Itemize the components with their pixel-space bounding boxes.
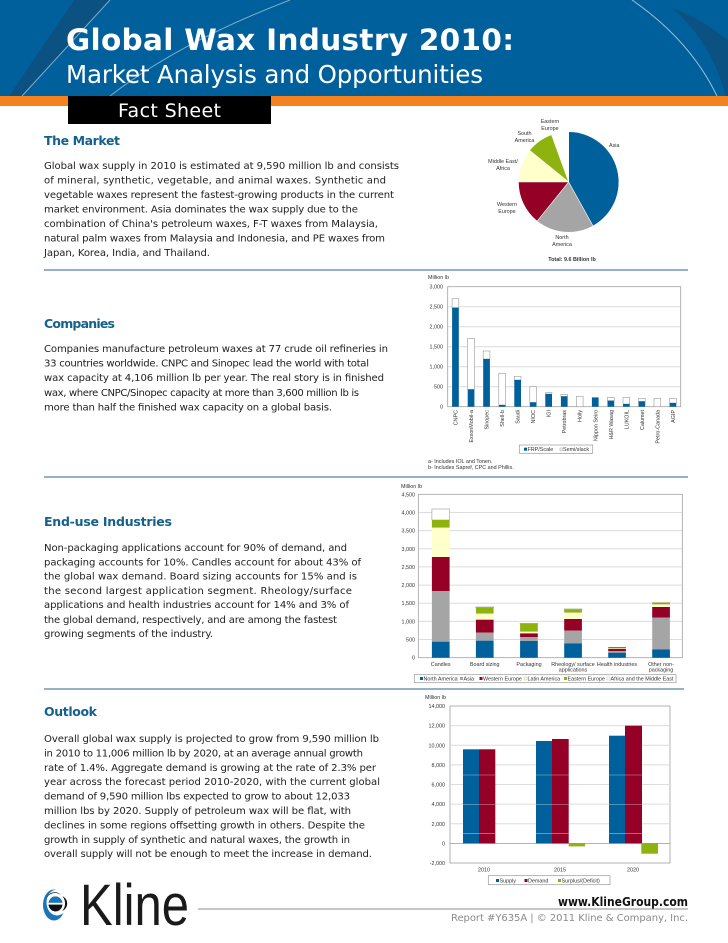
bar chart: supply and demand outlook: 2,000 [432, 822, 445, 828]
text block: companies: 33 countries worldwide. CNPC and Sinopec lead the world with total [44, 359, 369, 370]
bar chart: company capacity: b- Includes Sapref, CPC and Phillis. [428, 465, 514, 471]
stacked bar chart: end-use demand: Board sizing [470, 662, 500, 668]
heading: companies: Companies [44, 316, 115, 331]
bar chart: company capacity: ExxonMobil-a [469, 410, 475, 443]
text block: end-use industries: packaging accounts for 10%. Candles account for about 43% of [44, 557, 361, 568]
bar chart: company capacity: Holly [578, 410, 584, 422]
text block: end-use industries [44, 543, 361, 640]
text block: outlook: declines in some regions offsetting growth in others. Despite the [44, 820, 365, 831]
text block: end-use industries: the global demand, respectively, and are among the fastest [44, 615, 337, 626]
bar chart: supply and demand outlook: -2,000 [430, 861, 445, 867]
text block: outlook: Overall global wax supply is projected to grow from 9,590 million lb [44, 734, 379, 745]
text block: end-use industries: the global wax demand. Board sizing accounts for 15% and is [44, 572, 357, 583]
text block: outlook: year across the forecast period 2010-2020, with the current global [44, 777, 380, 788]
pie chart: supply by region: Europe [541, 126, 559, 132]
bar chart: company capacity: 1,500 [430, 345, 443, 351]
stacked bar chart: end-use demand: 0 [412, 656, 415, 662]
text block: outlook: million lbs by 2020. Supply of petroleum wax will be flat, with [44, 806, 351, 817]
pie chart: supply by region: Africa [496, 166, 510, 172]
bar chart: company capacity: Calumet [640, 410, 646, 430]
bar chart: company capacity: IGI [547, 410, 553, 417]
stacked bar chart: end-use demand: 4,500 [402, 492, 415, 498]
stacked bar chart: end-use demand: Health industries [597, 662, 637, 668]
bar chart: company capacity: 500 [434, 385, 443, 391]
pie chart: supply by region [488, 119, 620, 263]
text block: companies: wax, where CNPC/Sinopec capacity at more than 3,600 million lb is [44, 388, 359, 399]
bar chart: company capacity: Nippon Seiro [593, 410, 599, 441]
stacked bar chart: end-use demand: Rheology/ surface [551, 662, 595, 668]
bar chart: supply and demand outlook: 4,000 [432, 802, 445, 808]
logo: Kline [43, 873, 189, 938]
stacked bar chart: end-use demand: Latin America [528, 677, 560, 683]
stacked bar chart: end-use demand: Other non- [648, 662, 674, 668]
stacked bar chart: end-use demand: 2,000 [402, 583, 415, 589]
fact sheet tab [68, 96, 271, 124]
bar chart: company capacity: 2,000 [430, 325, 443, 331]
text block: the market: Global wax supply in 2010 is estimated at 9,590 million lb and consists [44, 161, 399, 172]
text block: outlook [44, 734, 380, 860]
bar chart: company capacity: Petro-Canada [655, 410, 661, 444]
stacked bar chart: end-use demand: 3,000 [402, 547, 415, 553]
heading: outlook: Outlook [44, 704, 98, 719]
text block: the market: of mineral, synthetic, vegetable, and animal waxes. Synthetic and [44, 176, 386, 186]
bar chart: company capacity: NIOC [531, 410, 537, 423]
stacked bar chart: end-use demand: 3,500 [402, 529, 415, 535]
bar chart: supply and demand outlook: Demand [528, 878, 548, 884]
text block: outlook: growth in supply of synthetic and natural waxes, the growth in [44, 835, 350, 846]
text block: outlook: overall supply will not be enough to meet the increase in demand. [44, 849, 372, 860]
bar chart: company capacity: CNPC [454, 410, 460, 425]
bar chart: supply and demand outlook: 2010 [478, 868, 490, 874]
stacked bar chart: end-use demand: 1,000 [402, 619, 415, 625]
fact sheet tab: Fact Sheet [118, 100, 221, 122]
bar chart: company capacity: 3,000 [430, 285, 443, 291]
bar chart: supply and demand outlook: 2015 [554, 868, 566, 874]
bar chart: supply and demand outlook: 8,000 [432, 763, 445, 769]
text block: companies: wax capacity at 4,106 million lb per year. The real story is in finished [44, 373, 384, 384]
text block: companies [44, 344, 388, 413]
bar chart: company capacity: Saudi [516, 410, 522, 424]
title: Global Wax Industry 2010: [66, 23, 514, 57]
bar chart: supply and demand outlook: Surplus/(Deficit) [562, 878, 600, 884]
stacked bar chart: end-use demand: Million lb [401, 484, 422, 490]
pie chart: supply by region: Middle East/ [488, 159, 518, 165]
report credit: Report #Y635A | © 2011 Kline & Company, Inc. [451, 913, 688, 924]
stacked bar chart: end-use demand: Eastern Europe [568, 677, 605, 683]
heading: the market: The Market [44, 133, 120, 148]
pie chart: supply by region: America [515, 138, 534, 144]
text block: end-use industries: Non-packaging applications account for 90% of demand, and [44, 543, 347, 554]
logo: Kline: Kline [80, 873, 189, 938]
stacked bar chart: end-use demand: 500 [406, 638, 415, 644]
stacked bar chart: end-use demand: applications [559, 668, 588, 674]
bar chart: supply and demand outlook: 2020 [627, 868, 639, 874]
header banner [0, 0, 728, 106]
bar chart: company capacity: 0 [440, 405, 443, 411]
text block: outlook: in 2010 to 11,006 million lb by 2020, at an average annual growth [44, 748, 363, 759]
bar chart: supply and demand outlook: 12,000 [428, 724, 445, 730]
stacked bar chart: end-use demand: Asia [464, 677, 474, 683]
text block: outlook: demand of 9,590 million lbs expected to grow to about 12,033 [44, 792, 350, 803]
stacked bar chart: end-use demand: 4,000 [402, 510, 415, 516]
bar chart: company capacity: 1,000 [430, 365, 443, 371]
website url: www.KlineGroup.com [558, 895, 688, 909]
stacked bar chart: end-use demand: Candles [431, 662, 451, 668]
pie chart: supply by region: South [517, 131, 532, 137]
bar chart: company capacity: LUKOIL [624, 410, 630, 429]
bar chart: company capacity: Semi/slack [563, 447, 589, 453]
bar chart: supply and demand outlook: 6,000 [432, 782, 445, 788]
pie chart: supply by region: North [555, 235, 569, 241]
text block: the market: combination of China's petroleum waxes, F-T waxes from Malaysia, [44, 219, 378, 230]
bar chart: supply and demand outlook: 10,000 [428, 743, 445, 749]
stacked bar chart: end-use demand: packaging [649, 668, 673, 674]
bar chart: company capacity: FRP/Scale [528, 447, 553, 453]
bar chart: company capacity: Petrobras [562, 410, 568, 433]
stacked bar chart: end-use demand: 1,500 [402, 601, 415, 607]
bar chart: supply and demand outlook: Million lb [425, 695, 446, 701]
bar chart: company capacity: 2,500 [430, 305, 443, 311]
bar chart: supply and demand outlook: Supply [500, 878, 516, 884]
bar chart: supply and demand outlook [425, 695, 670, 885]
text block: end-use industries: applications and health industries account for 14% and 3% of [44, 600, 349, 611]
pie chart: supply by region: Eastern [541, 119, 559, 125]
text block: the market: natural palm waxes from Malaysia and Indonesia, and PE waxes from [44, 234, 385, 244]
heading: end-use industries: End-use Industries [44, 514, 172, 529]
text block: outlook: rate of 1.4%. Aggregate demand is growing at the rate of 2.3% per [44, 763, 377, 774]
stacked bar chart: end-use demand: Western Europe [483, 677, 522, 683]
text block: end-use industries: growing segments of the industry. [44, 629, 213, 640]
stacked bar chart: end-use demand [401, 484, 682, 683]
text block: companies: Companies manufacture petroleum waxes at 77 crude oil refineries in [44, 344, 388, 355]
bar chart: supply and demand outlook: 0 [442, 841, 445, 847]
pie chart: supply by region: Western [497, 202, 517, 208]
text block: the market: vegetable waxes represent the fastest-growing products in the current [44, 190, 394, 201]
stacked bar chart: end-use demand: North America [424, 677, 458, 683]
bar chart: company capacity: H&R Wasag [609, 410, 615, 439]
bar chart: company capacity: Shell-b [500, 410, 506, 427]
pie chart: supply by region: Total: 9.6 Billion lb [548, 257, 596, 263]
text block: the market: market environment. Asia dominates the wax supply due to the [44, 204, 358, 216]
bar chart: company capacity: Sinopec [485, 410, 491, 429]
text block: companies: more than half the finished wax capacity on a global basis. [44, 402, 332, 413]
bar chart: supply and demand outlook: 14,000 [428, 704, 445, 710]
stacked bar chart: end-use demand: Africa and the Middle East [610, 677, 674, 683]
pie chart: supply by region: Europe [498, 209, 516, 215]
bar chart: company capacity: Million lb [428, 275, 449, 281]
bar chart: company capacity: a- Includes IOL and Tonen. [428, 459, 492, 465]
bar chart: company capacity [428, 275, 681, 471]
pie chart: supply by region: Asia [609, 143, 620, 149]
stacked bar chart: end-use demand: Packaging [516, 662, 542, 668]
bar chart: company capacity: AGIP [671, 410, 677, 423]
subtitle: Market Analysis and Opportunities [66, 60, 483, 89]
pie chart: supply by region: America [552, 242, 572, 248]
text block: end-use industries: the second largest application segment. Rheology/surface [44, 586, 352, 597]
stacked bar chart: end-use demand: 2,500 [402, 565, 415, 571]
text block: the market: Japan, Korea, India, and Thailand. [43, 248, 210, 259]
text block: the market [43, 161, 399, 259]
